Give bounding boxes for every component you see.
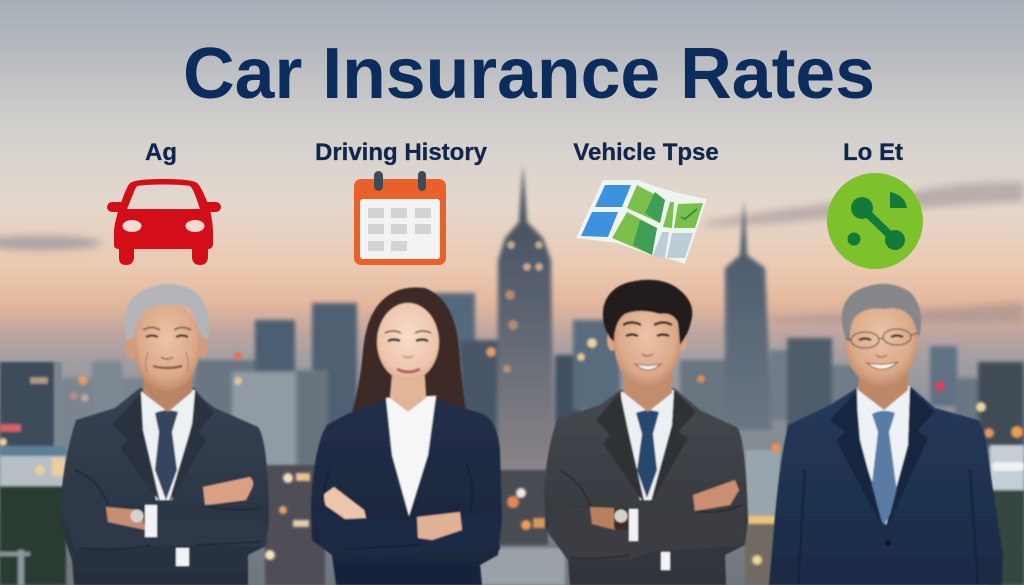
crossed arms bbox=[546, 507, 745, 560]
tie bbox=[155, 410, 178, 500]
ears bbox=[607, 329, 687, 351]
crossed arms bbox=[312, 510, 500, 558]
neck bbox=[143, 372, 192, 412]
face bbox=[614, 298, 680, 388]
background: left office block and low-rise buildings bbox=[0, 362, 1024, 585]
column: Vehicle Type label: Vehicle Tpse bbox=[573, 139, 719, 166]
background: city lights bbox=[0, 241, 1024, 565]
crossed arms bbox=[60, 492, 267, 550]
sleeve creases bbox=[560, 470, 742, 559]
person: older man with glasses bbox=[769, 284, 1003, 585]
icon: folded map bbox=[576, 180, 707, 264]
fringe bbox=[374, 292, 444, 340]
wristwatch and cuff bbox=[614, 508, 638, 541]
facial features bbox=[623, 322, 672, 356]
sleeve creases bbox=[323, 465, 472, 549]
wristwatch and cuff bbox=[130, 505, 157, 537]
lapels bbox=[112, 392, 214, 505]
shirt bbox=[386, 396, 436, 516]
smile bbox=[867, 362, 898, 369]
jacket bbox=[769, 386, 1003, 585]
facial features bbox=[143, 328, 191, 372]
button bbox=[885, 540, 891, 546]
person: older man with grey hair bbox=[60, 284, 269, 585]
background: clouds bbox=[0, 182, 1024, 324]
jacket bbox=[311, 398, 502, 585]
hair bbox=[124, 284, 209, 340]
background: blurred city skyline bbox=[60, 165, 1024, 492]
lapels bbox=[596, 390, 696, 505]
jacket bbox=[60, 388, 269, 585]
hair bbox=[352, 287, 466, 412]
glasses bbox=[846, 329, 918, 348]
shirt bbox=[857, 386, 910, 525]
jacket bbox=[544, 388, 748, 585]
column: Location label: Lo Et bbox=[843, 139, 903, 166]
icon: green circle with nodes bbox=[827, 173, 923, 269]
column: Age label: Ag bbox=[145, 139, 177, 166]
face bbox=[134, 301, 200, 391]
person: woman with long brown hair bbox=[311, 287, 502, 585]
neck bbox=[623, 365, 672, 412]
sleeve seams bbox=[798, 470, 978, 585]
facial features bbox=[385, 331, 431, 372]
column: Driving History label: Driving History bbox=[315, 139, 488, 166]
icon: red car bbox=[107, 179, 221, 265]
shirt bbox=[621, 390, 674, 500]
neck bbox=[858, 370, 908, 410]
smile bbox=[635, 364, 661, 370]
tie bbox=[870, 411, 898, 525]
face bbox=[377, 303, 439, 381]
hair bbox=[603, 280, 692, 345]
shirt and collar bbox=[141, 390, 195, 500]
lapels bbox=[830, 388, 935, 530]
hair bbox=[842, 284, 921, 342]
title: Car Insurance Rates bbox=[183, 34, 875, 114]
neck bbox=[390, 365, 426, 412]
facial features bbox=[859, 336, 903, 357]
sleeve creases bbox=[75, 470, 262, 549]
icon: calendar bbox=[354, 171, 446, 265]
ears bbox=[125, 334, 208, 360]
face bbox=[845, 297, 917, 387]
tie bbox=[636, 410, 659, 498]
person: young man with dark hair bbox=[544, 280, 748, 585]
